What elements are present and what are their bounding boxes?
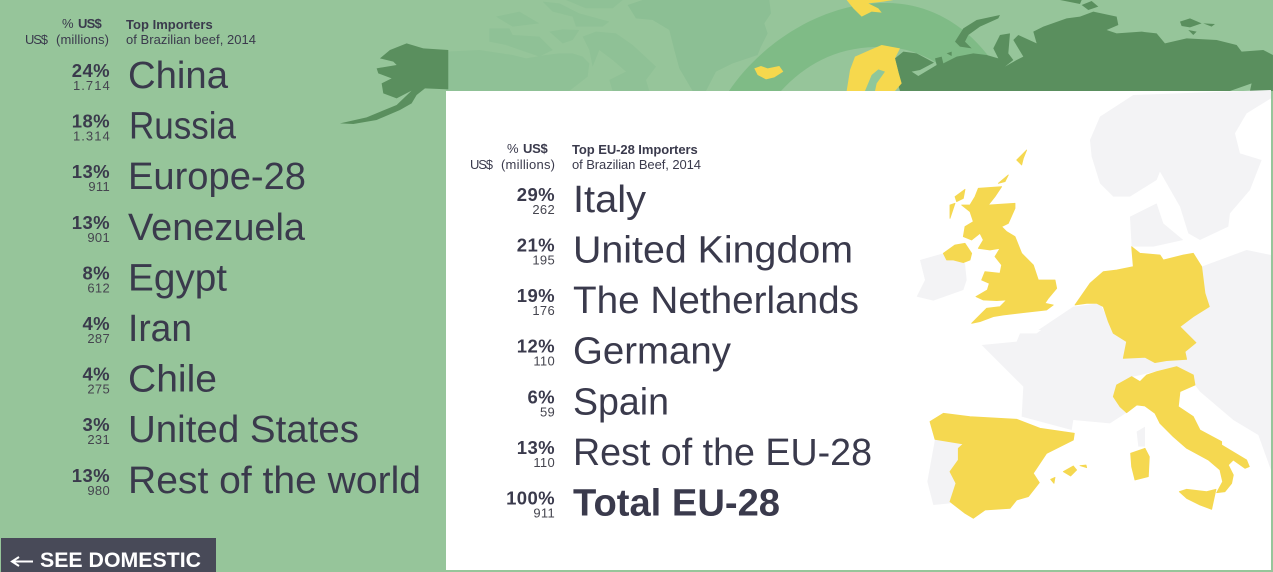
row: Spain: Spain [573, 381, 669, 423]
row: Rest of the EU-28: 13% [517, 437, 555, 458]
row: United States: 231 [87, 432, 110, 447]
button: see domestic [1, 538, 216, 572]
row: Europe-28: 911 [88, 179, 110, 194]
row: Iran: Iran [128, 308, 192, 350]
top importers column headers: Top Importers [126, 17, 213, 32]
row: The Netherlands: The Netherlands [573, 280, 859, 322]
row: Iran [82, 308, 192, 350]
row: Total EU-28: 100% [506, 488, 555, 508]
row: Venezuela: 901 [87, 230, 110, 245]
Alaska [340, 43, 448, 124]
row: Russia: 1.314 [73, 129, 110, 144]
row: Germany: 12% [517, 336, 555, 357]
row: Europe-28: Europe-28 [128, 156, 306, 198]
row: Venezuela: Venezuela [128, 207, 306, 249]
row: Chile: 275 [87, 382, 110, 397]
row: Total EU-28: Total EU-28 [573, 482, 780, 524]
top importers column headers [25, 16, 256, 47]
row: Iran: 287 [87, 331, 110, 346]
row: Chile: 4% [82, 364, 110, 385]
row: Chile [82, 359, 217, 401]
row: Chile: Chile [128, 359, 217, 401]
EU-28 column headers: Top EU-28 Importers [572, 142, 698, 157]
EU-28 column headers: US$ [470, 157, 494, 172]
top importers column headers: (millions) [56, 32, 109, 47]
row: Venezuela: 13% [72, 212, 110, 233]
top importers column headers: US$ [78, 16, 102, 31]
row: The Netherlands: 176 [532, 303, 555, 318]
row: United Kingdom: 195 [532, 252, 555, 268]
row: United States: 3% [82, 414, 110, 435]
neighbouring countries in grey [917, 90, 1271, 505]
row: Rest of the EU-28: 110 [533, 455, 555, 470]
row: Egypt: 8% [82, 262, 110, 283]
row: Italy: 29% [517, 184, 555, 205]
row: Egypt: 612 [87, 280, 110, 295]
row: Italy [517, 179, 646, 221]
Svalbard in yellow [847, 0, 893, 17]
Iceland in yellow [754, 66, 783, 79]
row: The Netherlands: 19% [517, 285, 555, 306]
row: China: 1.714 [73, 78, 110, 93]
row: Germany: 110 [533, 354, 555, 369]
row: Rest of the EU-28: Rest of the EU-28 [573, 432, 872, 474]
row: Iran: 4% [82, 313, 110, 334]
row: Germany: Germany [573, 331, 731, 373]
row: Rest of the world: Rest of the world [128, 460, 421, 502]
row: Egypt [82, 257, 227, 299]
row: Spain [527, 381, 669, 423]
row: Russia [72, 106, 237, 148]
Greenland [628, 0, 771, 91]
Russia and Arctic islands [895, 0, 1273, 91]
top importers column headers: US$ [25, 32, 49, 47]
EU-28 column headers: of Brazilian Beef, 2014 [572, 157, 701, 172]
row: Russia: Russia [129, 106, 237, 148]
row: Spain: 59 [540, 404, 555, 419]
button: see domestic: SEE DOMESTIC [40, 548, 201, 572]
United Kingdom [943, 150, 1057, 323]
row: Rest of the world: 980 [87, 483, 110, 498]
row: Europe-28: 13% [72, 161, 110, 182]
row: China [72, 55, 229, 97]
Canada and Arctic archipelago [446, 0, 656, 91]
EU-28 column headers: % [507, 141, 519, 156]
EU-28 column headers: (millions) [501, 157, 555, 172]
Scandinavia in yellow [847, 45, 902, 91]
Italy and Spain [930, 367, 1249, 518]
top importers column headers: % [62, 16, 74, 31]
row: China: 24% [72, 60, 110, 81]
row: Total EU-28: 911 [533, 506, 555, 520]
EU-28 column headers [470, 141, 701, 172]
row: China: China [128, 55, 229, 97]
row: United States: United States [128, 409, 359, 451]
migration arc band [729, 3, 990, 91]
row: Rest of the world: 13% [72, 465, 110, 486]
row: Russia: 18% [72, 111, 110, 132]
top importers column headers: of Brazilian beef, 2014 [126, 32, 256, 47]
panel: EU-28 importers [446, 90, 1271, 570]
EU-28 column headers: US$ [523, 141, 548, 156]
Germany and The Netherlands [1075, 247, 1209, 363]
row: United Kingdom: United Kingdom [573, 230, 853, 272]
row: Italy: 262 [532, 202, 555, 217]
row: United Kingdom: 21% [517, 234, 555, 256]
row: Spain: 6% [527, 386, 555, 407]
icon: left arrow [12, 557, 33, 566]
row: Egypt: Egypt [128, 257, 227, 299]
row: Italy: Italy [573, 179, 646, 221]
map of Europe [917, 90, 1271, 518]
